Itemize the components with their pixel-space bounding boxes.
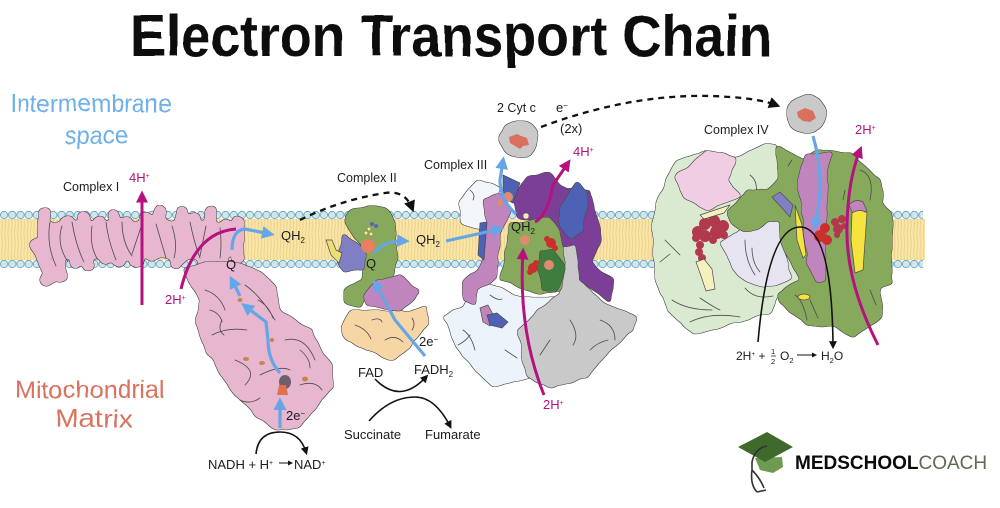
wordmark: MEDSCHOOLCOACH (795, 453, 987, 474)
complex II (326, 205, 427, 360)
inner creases (458, 190, 615, 358)
Complex IV label: Complex IV (704, 123, 769, 137)
olive creases (788, 160, 876, 320)
blue oval subunit (560, 182, 588, 240)
text labels (63, 100, 876, 472)
iron-sulfur clusters (238, 298, 308, 381)
label: intermembrane space (10, 90, 172, 150)
NADH equation: NADH + H (208, 457, 269, 472)
2e- complex II: − (433, 335, 438, 344)
pale blue lower domain (443, 280, 563, 387)
lavender subunit (720, 220, 792, 288)
cytochrome c to complex IV arc (541, 96, 776, 127)
H2O label: 2 (830, 356, 834, 365)
complex I membrane domain (36, 212, 238, 280)
dark purple domain (513, 173, 613, 303)
NAD+ label: + (321, 460, 326, 467)
NADH arc (256, 432, 306, 454)
Complex III label: Complex III (424, 158, 487, 172)
QH2 to complex II arc (300, 193, 412, 220)
QH2 label left: QH (281, 228, 300, 243)
complex II tan domain (340, 307, 427, 360)
2H+ complex I (181, 229, 236, 289)
4H+ complex III (535, 163, 568, 222)
label: mitochondrial matrix: Matrix (55, 405, 134, 433)
label: mitochondrial matrix (15, 376, 165, 433)
Complex II label: Complex II (337, 171, 397, 185)
4H+ complex I (140, 195, 144, 305)
2H+ complex IV (847, 150, 878, 345)
dashed electron transfer arrows (300, 96, 776, 220)
2H+ label: + (182, 295, 186, 302)
QH2 label centre: QH (416, 232, 436, 247)
title: Electron Transport Chain (130, 4, 772, 69)
2H+ complex III label: 2H (543, 397, 560, 412)
O2 to water arrow (797, 354, 815, 356)
blue subunit (772, 192, 793, 217)
pale green domain (652, 143, 800, 335)
blue electron arrows (232, 136, 820, 428)
magenta proton arrows (142, 150, 878, 395)
red heme clusters (692, 215, 847, 262)
O2 label: O (780, 349, 789, 363)
complex I helix creases (49, 222, 221, 266)
complex I (36, 212, 333, 430)
2 Cyt c label: 2 Cyt c (497, 101, 536, 115)
white upper domain (458, 180, 500, 232)
pink subunit (675, 150, 740, 210)
mauve subunit (462, 192, 510, 305)
heme and clusters (361, 222, 378, 253)
complex I arm creases (205, 285, 322, 402)
Q label complex II: Q (366, 256, 376, 271)
complex III (443, 173, 637, 388)
Succinate label: Succinate (344, 427, 401, 442)
label: intermembrane space: Intermembrane (10, 90, 172, 118)
yellow subunits (795, 201, 867, 300)
mauve subunit (797, 153, 833, 283)
2e- complex I: 2e (286, 408, 300, 423)
2e- complex II: 2e (419, 334, 433, 349)
QH2 label centre: 2 (436, 240, 440, 249)
succinate arc (369, 397, 450, 426)
icon: stethoscope (752, 446, 767, 492)
black reaction arrows (256, 227, 833, 463)
FAD label: FAD (358, 365, 383, 380)
complex I matrix arm (182, 262, 333, 430)
2H+ complex III (522, 252, 544, 395)
QH2 complex III: 2 (530, 227, 536, 236)
one half fraction: 1 (771, 347, 775, 356)
2H+ label: 2H (165, 292, 182, 307)
complex II green subunit (343, 205, 397, 307)
H2O label: O (834, 349, 843, 363)
complex II tan creases (355, 318, 414, 342)
complex II electron path (375, 283, 425, 356)
phospholipid membrane (0, 209, 925, 270)
cytochrome c at complex III (500, 120, 538, 158)
2e- complex I: − (300, 409, 305, 418)
Fumarate label: Fumarate (425, 427, 481, 442)
complex II mauve subunit (363, 275, 420, 312)
4H+ label: + (146, 173, 150, 180)
e- label: e (556, 100, 563, 115)
label: mitochondrial matrix: Mitochondrial (15, 376, 165, 404)
complex IV (652, 143, 892, 337)
cream subunits (696, 205, 730, 291)
grey domain (517, 243, 637, 388)
2H+ complex IV label: + (872, 125, 876, 132)
yellow helix (326, 240, 342, 263)
4H+ label: 4H (129, 170, 146, 185)
FMN site (277, 375, 291, 395)
FAD arc (375, 377, 426, 392)
oxygen reaction left: + (755, 349, 765, 363)
4H+ complex III label: + (590, 147, 594, 154)
lavender creases (745, 240, 760, 275)
cytochrome c at complex IV (788, 95, 826, 133)
H+ to NAD+ arrow (279, 462, 291, 464)
olive green domain (727, 145, 892, 337)
one half fraction: 2 (771, 357, 775, 366)
oxygen reaction left: 2H (736, 349, 751, 363)
complex I electron path (278, 402, 282, 428)
NADH equation: + (269, 460, 273, 467)
oxygen reaction left: + (751, 351, 755, 358)
MedSchoolCoach logo (738, 432, 987, 492)
small blue subunits (478, 175, 520, 260)
hemes (497, 192, 558, 275)
QH2 label left: 2 (300, 236, 306, 245)
O2 label: 2 (789, 356, 794, 365)
QH2 to complex III (446, 229, 500, 241)
pale green creases (660, 175, 773, 322)
one half fraction (771, 347, 776, 366)
Complex I label: Complex I (63, 180, 119, 194)
2H+ complex III label: + (560, 400, 564, 407)
FADH2 label: 2 (449, 370, 454, 379)
complex IV water arc (758, 227, 833, 346)
H2O label: H (821, 349, 830, 363)
2H+ complex IV label: 2H (855, 122, 872, 137)
dark green subunit (539, 250, 565, 290)
2x label: (2x) (560, 121, 582, 136)
icon: graduation cap (738, 432, 793, 473)
NAD+ label: NAD (294, 457, 321, 472)
e- label: − (563, 101, 568, 110)
green subunit (500, 218, 565, 293)
lower mauve and blue subunit (480, 305, 508, 328)
FADH2 label: FADH (414, 362, 449, 377)
label: intermembrane space: space (65, 122, 128, 150)
4H+ complex III label: 4H (573, 144, 590, 159)
complex II blue subunit (337, 233, 367, 272)
cytochrome to complex IV (813, 136, 820, 226)
QH2 complex III: QH (511, 219, 530, 234)
Q label complex I: Q (226, 257, 236, 272)
